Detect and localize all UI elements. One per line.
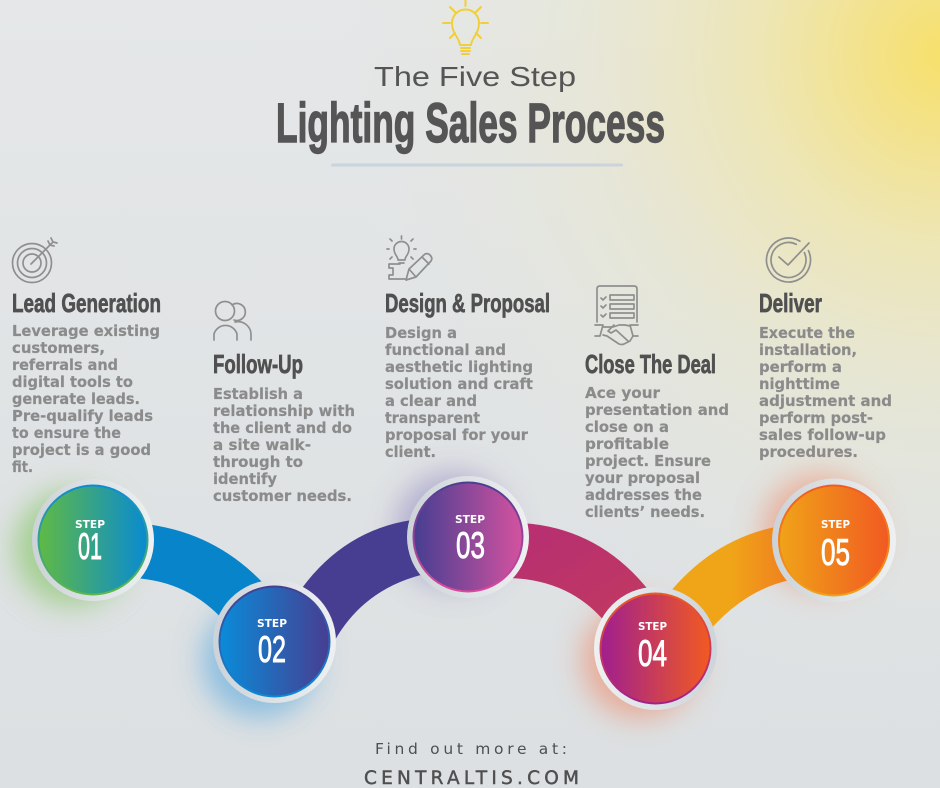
text: lead generation description: digital tools to — [12, 373, 133, 391]
heading: design and proposal: Design & Proposal — [385, 288, 550, 318]
footer call to action — [364, 740, 579, 788]
icon: check circle — [759, 231, 818, 289]
panel: step 2 follow-up — [213, 302, 355, 505]
icon: light bulb — [443, 0, 488, 54]
step 4 circle: 04 — [638, 633, 667, 674]
icon: bulb and pencil — [387, 236, 432, 280]
text: deliver description: perform post- — [759, 409, 873, 427]
step 5 circle — [772, 478, 896, 602]
text: lead generation description: to ensure the — [12, 424, 121, 442]
text: follow-up description: the client and do — [213, 419, 352, 437]
footer call to action: Find out more at: — [375, 740, 567, 758]
text: deliver description: Execute the — [759, 324, 855, 342]
panel: step 5 deliver — [759, 231, 892, 461]
step 2 circle: 02 — [258, 629, 286, 670]
panel: step 3 design and proposal — [385, 236, 550, 461]
connector arc: step 3 to 4 — [510, 523, 650, 622]
text: design and proposal description: aesthetic lighting — [385, 358, 533, 376]
title: Lighting Sales Process — [276, 91, 665, 154]
text: follow-up description: relationship with — [213, 402, 355, 420]
step 2 circle — [213, 580, 336, 703]
text: lead generation description: project is a good — [12, 441, 151, 459]
step 1 circle: 01 — [78, 526, 102, 567]
step 2 circle: STEP — [257, 618, 287, 630]
text: deliver description: perform a — [759, 358, 842, 376]
connector arc: step 1 to 2 — [135, 524, 264, 622]
text: close the deal description: addresses the — [585, 486, 702, 504]
text: deliver description — [759, 324, 892, 461]
title divider — [331, 164, 623, 166]
text: close the deal description: close on a — [585, 418, 669, 436]
panel: step 1 lead generation — [12, 238, 161, 476]
text: lead generation description — [12, 322, 160, 476]
text: lead generation description: Leverage existing — [12, 322, 160, 340]
text: design and proposal description: client. — [385, 443, 436, 461]
step 4 circle: STEP — [638, 621, 667, 633]
text: design and proposal description: solution and craft — [385, 375, 533, 393]
title: The Five Step — [374, 61, 576, 92]
text: deliver description: sales follow-up — [759, 426, 886, 444]
text: deliver description: procedures. — [759, 443, 858, 461]
icon: people — [214, 302, 251, 340]
text: design and proposal description: proposal for your — [385, 426, 529, 444]
heading: close the deal: Close The Deal — [585, 349, 716, 379]
text: follow-up description: identify — [213, 470, 277, 488]
text: close the deal description — [585, 384, 729, 521]
text: lead generation description: referrals and — [12, 356, 118, 374]
panel: step 4 close the deal — [585, 286, 729, 521]
connector arc: step 4 to 5 — [670, 526, 790, 630]
step 5 circle: STEP — [821, 519, 850, 531]
heading: deliver: Deliver — [759, 288, 822, 318]
text: follow-up description: customer needs. — [213, 487, 352, 505]
text: design and proposal description — [385, 324, 533, 461]
connector arc: step 2 to 3 — [302, 520, 425, 640]
text: design and proposal description: Design a — [385, 324, 457, 342]
text: follow-up description: through to — [213, 453, 303, 471]
step 4 circle — [594, 587, 717, 710]
text: lead generation description: customers, — [12, 339, 105, 357]
text: close the deal description: profitable — [585, 435, 669, 453]
text: lead generation description: generate leads. — [12, 390, 140, 408]
icon: target — [12, 238, 57, 282]
text: close the deal description: your proposal — [585, 469, 700, 487]
text: deliver description: adjustment and — [759, 392, 892, 410]
glows behind step circles — [14, 472, 878, 718]
heading: follow-up: Follow-Up — [213, 349, 303, 379]
title — [276, 61, 665, 154]
step 1 circle: STEP — [75, 519, 105, 531]
text: lead generation description: Pre-qualify leads — [12, 407, 153, 425]
step 3 circle — [407, 476, 529, 598]
text: design and proposal description: a clear and — [385, 392, 477, 410]
step 5 circle: 05 — [821, 532, 850, 573]
text: deliver description: installation, — [759, 341, 857, 359]
text: design and proposal description: functional and — [385, 341, 506, 359]
text: design and proposal description: transparent — [385, 409, 480, 427]
text: follow-up description — [213, 385, 355, 505]
text: follow-up description: a site walk- — [213, 436, 311, 454]
text: follow-up description: Establish a — [213, 385, 303, 403]
step 3 circle: 03 — [456, 525, 485, 566]
step 1 circle — [32, 479, 154, 601]
text: close the deal description: clients’ needs. — [585, 503, 705, 521]
text: deliver description: nighttime — [759, 375, 840, 393]
icon: contract and handshake — [595, 286, 638, 344]
heading: lead generation: Lead Generation — [12, 288, 161, 318]
text: close the deal description: Ace your — [585, 384, 661, 402]
step 3 circle: STEP — [455, 514, 485, 526]
text: lead generation description: fit. — [12, 458, 33, 476]
text: close the deal description: presentation and — [585, 401, 729, 419]
text: close the deal description: project. Ensure — [585, 452, 711, 470]
